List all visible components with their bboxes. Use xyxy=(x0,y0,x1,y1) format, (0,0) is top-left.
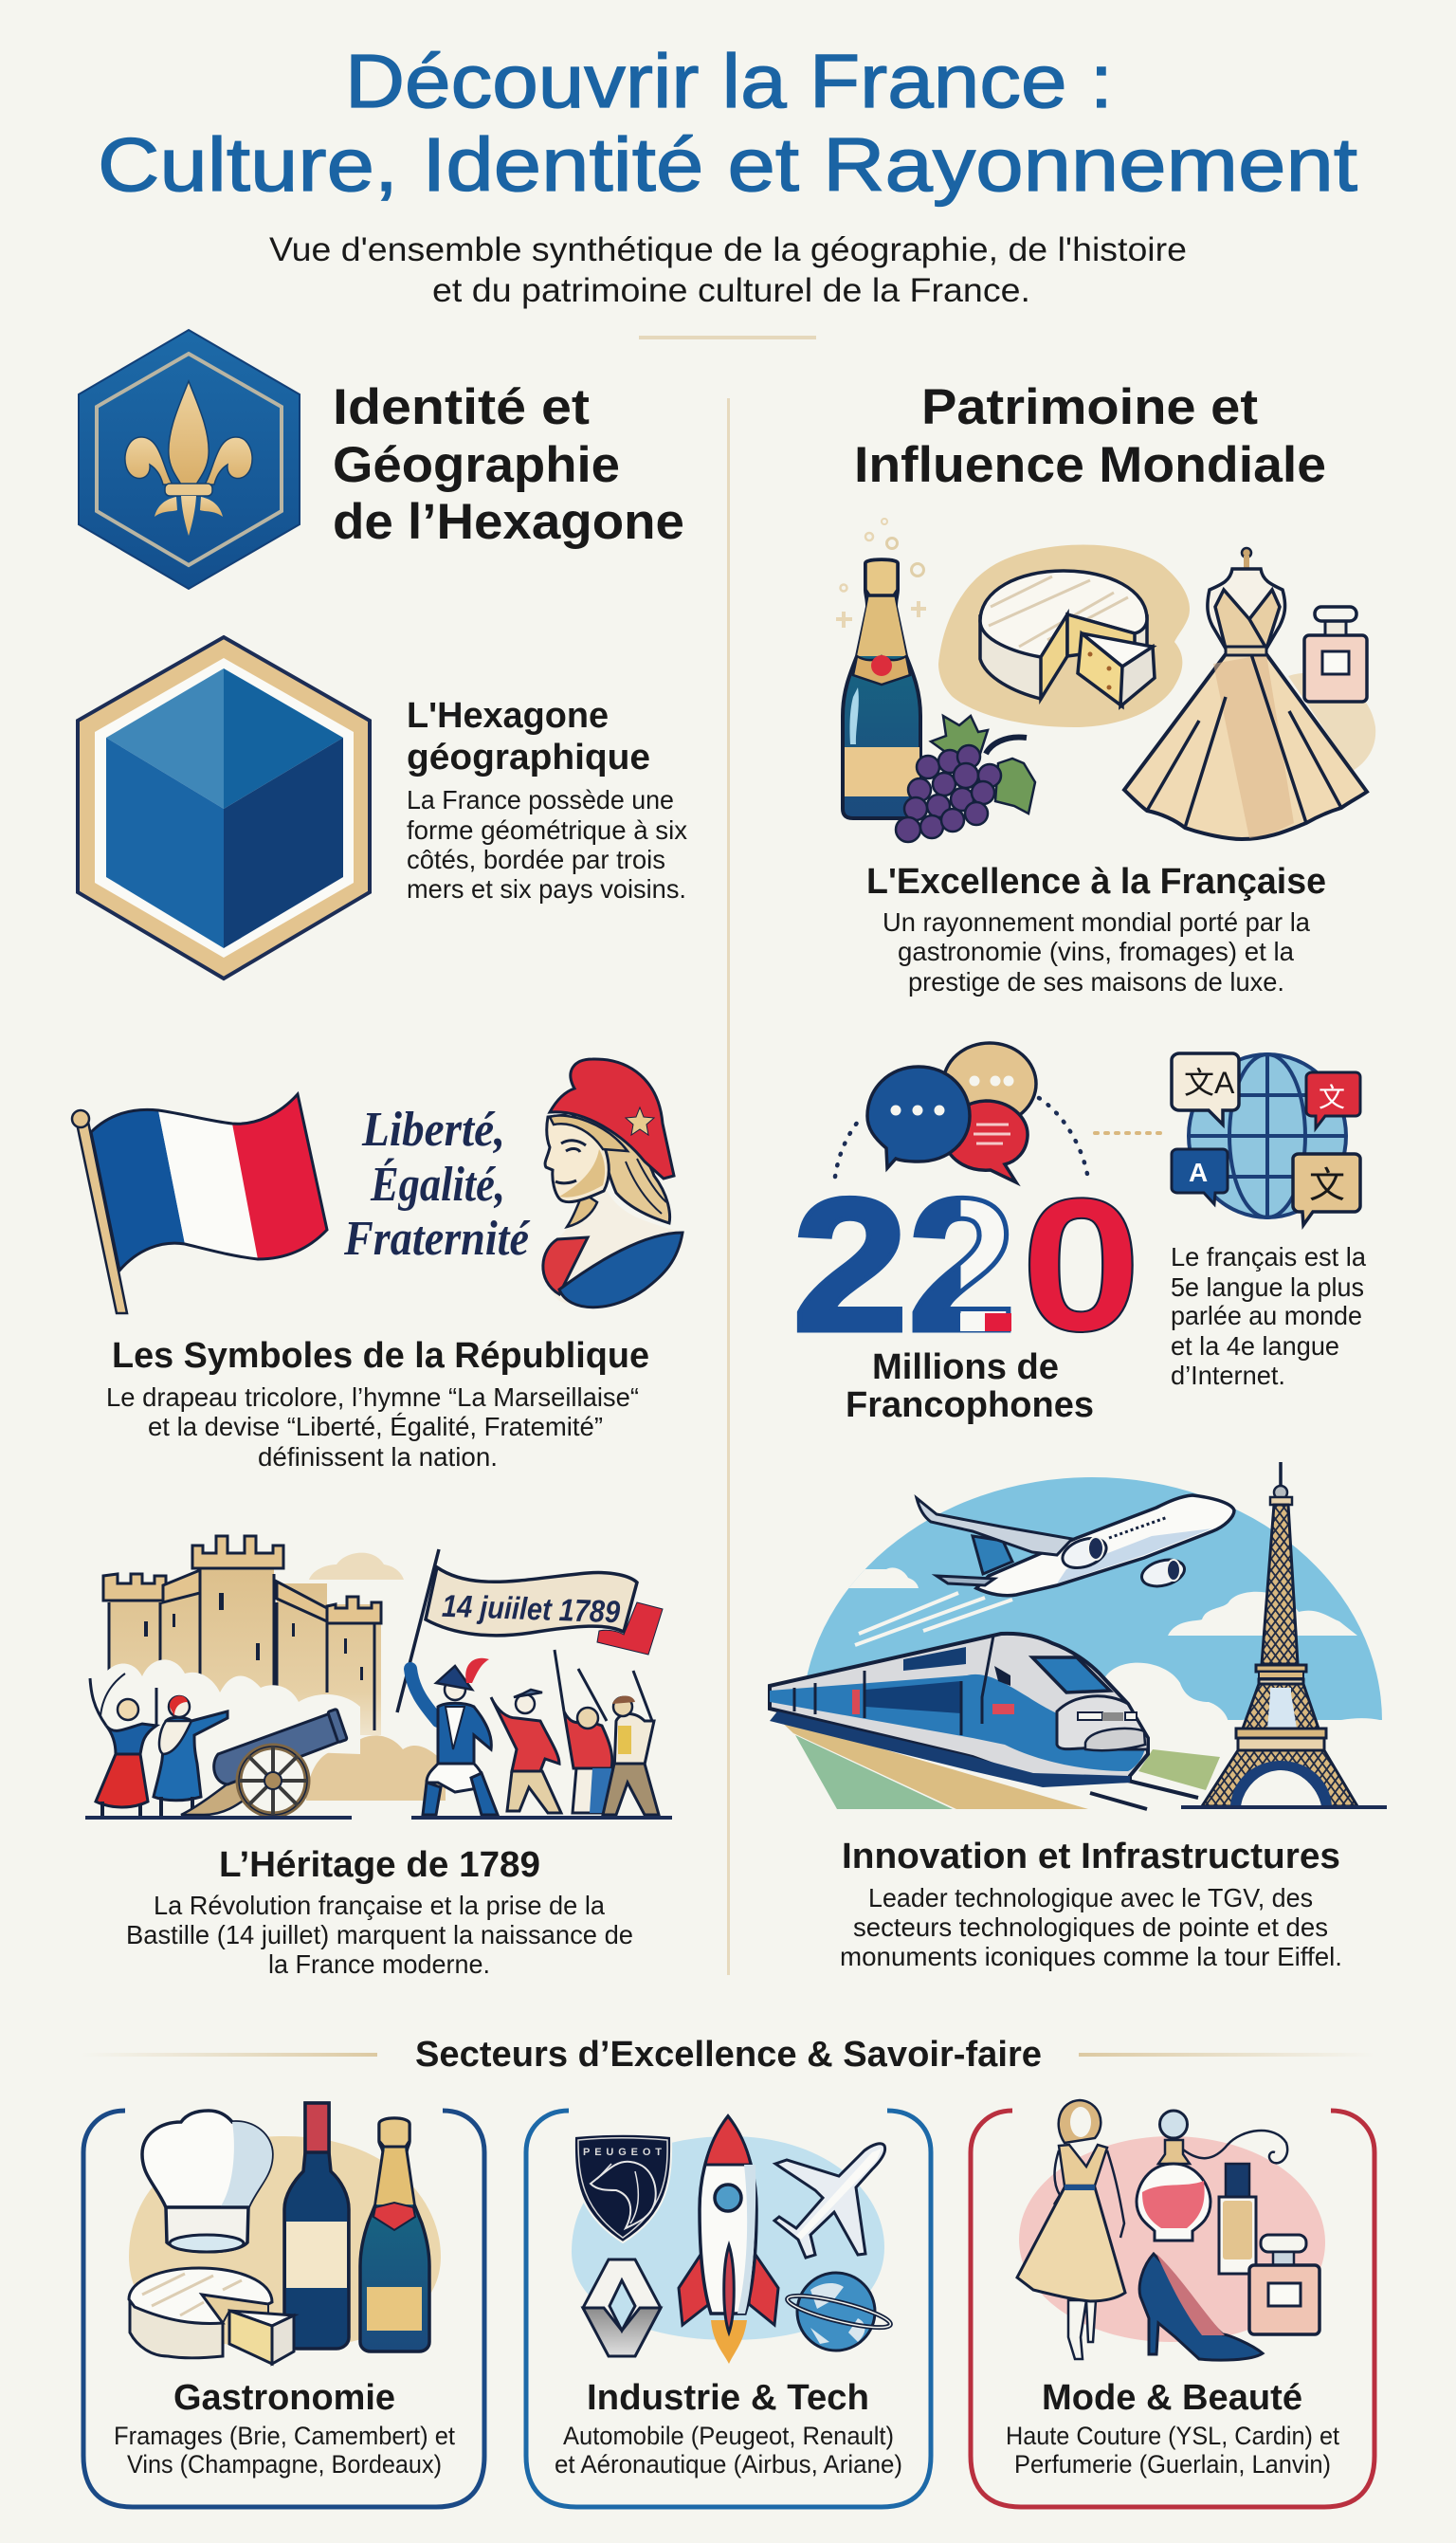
text: hexagone description: La France possède une xyxy=(407,785,674,814)
icon: fleur-de-lis hexagon badge xyxy=(79,330,300,589)
text: symboles description: et la devise “Liberté, Égalité, Fratemité” xyxy=(148,1412,603,1441)
icon: revolutionaries group xyxy=(410,1650,659,1815)
text: industrie description: Automobile (Peugeot, Renault) xyxy=(563,2422,894,2450)
panel: innovation et infrastructures xyxy=(770,1462,1387,1971)
text: motto xyxy=(343,1103,531,1266)
text: héritage heading: L’Héritage de 1789 xyxy=(219,1845,540,1885)
panel: l'Hexagone géographique xyxy=(78,637,687,979)
section heading: secteurs xyxy=(82,2035,1374,2075)
text: francophonie description: 5e langue la plus xyxy=(1171,1272,1364,1302)
text: motto: Égalité, xyxy=(370,1157,505,1212)
text: symboles description: Le drapeau tricolore, l’hymne “La Marseillaise“ xyxy=(106,1382,639,1412)
icon: Bastille fortress xyxy=(100,1536,446,1801)
text: innovation description: monuments iconiques comme la tour Eiffel. xyxy=(840,1942,1342,1971)
big number 220: 2 xyxy=(908,1160,1016,1371)
text: mode title: Mode & Beauté xyxy=(1042,2378,1302,2418)
text: symboles description xyxy=(106,1382,639,1472)
card: gastronomie xyxy=(83,2103,484,2507)
text: excellence heading: L'Excellence à la Française xyxy=(866,862,1326,902)
text: mode description xyxy=(1006,2422,1339,2479)
icon: fashion and beauty xyxy=(1017,2100,1325,2360)
heading: right column: Influence Mondiale xyxy=(854,437,1326,493)
icon: airplane xyxy=(917,1495,1234,1596)
icon: revolutionary flag banner: 14 juiilet 1789 xyxy=(442,1588,621,1629)
section heading: secteurs: Secteurs d’Excellence & Savoir-faire xyxy=(415,2035,1042,2075)
text: gastronomie title: Gastronomie xyxy=(173,2378,395,2418)
subtitle: et du patrimoine culturel de la France. xyxy=(432,272,1030,309)
text: hexagone description xyxy=(407,785,687,904)
icon: globe with translation bubbles: 文 xyxy=(1319,1077,1345,1115)
text: hexagone heading: géographique xyxy=(407,738,650,778)
text: hexagone heading xyxy=(407,696,650,778)
panel: excellence française xyxy=(836,519,1375,997)
big number 220: 0 xyxy=(1021,1160,1141,1371)
text: symboles heading: Les Symboles de la République xyxy=(112,1336,649,1376)
text: innovation description xyxy=(840,1883,1342,1971)
title: Culture, Identité et Rayonnement xyxy=(98,122,1357,207)
icon: perfume bottle xyxy=(1304,607,1367,702)
icon: industry emblems xyxy=(572,2116,893,2364)
text: excellence description: Un rayonnement mondial porté par la xyxy=(883,907,1310,937)
heading: left column xyxy=(333,379,684,550)
icon: globe with translation bubbles: 文A xyxy=(1184,1066,1235,1100)
text: industrie description: et Aéronautique (Airbus, Ariane) xyxy=(555,2450,902,2479)
icon: TGV train on tracks xyxy=(770,1634,1220,1809)
big number 220 xyxy=(792,1160,1141,1371)
icon: cheese with tan blob xyxy=(938,544,1190,727)
icon: sky circle with clouds xyxy=(796,1477,1384,1735)
text: francophones label: Millions de xyxy=(872,1347,1059,1387)
text: francophonie description: et la 4e langue xyxy=(1171,1331,1339,1361)
text: héritage description: Bastille (14 juillet) marquent la naissance de xyxy=(126,1920,633,1949)
icon: French flag xyxy=(72,1094,327,1313)
text: francophonie description: parlée au monde xyxy=(1171,1301,1362,1330)
icon: gown on mannequin xyxy=(1124,548,1375,839)
text: héritage description: La Révolution française et la prise de la xyxy=(154,1891,605,1920)
icon: globe with translation bubbles: 文 xyxy=(1309,1156,1345,1208)
panel: francophonie xyxy=(792,1043,1366,1425)
heading: left column: Géographie xyxy=(333,437,620,493)
text: excellence description: prestige de ses maisons de luxe. xyxy=(908,967,1284,997)
text: hexagone description: mers et six pays voisins. xyxy=(407,874,686,904)
text: francophones label: Francophones xyxy=(846,1385,1094,1425)
text: francophones label xyxy=(846,1347,1094,1425)
heading: right column xyxy=(854,379,1326,493)
text: héritage description xyxy=(126,1891,633,1979)
heading: left column: de l’Hexagone xyxy=(333,494,684,550)
text: francophonie description xyxy=(1171,1242,1366,1390)
subtitle xyxy=(269,231,1187,309)
title: Découvrir la France : xyxy=(345,39,1113,123)
text: mode description: Perfumerie (Guerlain, Lanvin) xyxy=(1014,2450,1331,2479)
card: mode et beauté xyxy=(971,2100,1374,2507)
panel: symboles de la République xyxy=(72,1059,682,1472)
icon: Marianne xyxy=(542,1059,682,1308)
text: héritage description: la France moderne. xyxy=(268,1949,490,1979)
text: hexagone description: côtés, bordée par trois xyxy=(407,845,665,874)
panel: héritage de 1789 xyxy=(85,1536,672,1979)
text: innovation description: secteurs technologiques de pointe et des xyxy=(853,1912,1328,1942)
icon: champagne bottle and bubbles xyxy=(836,519,926,818)
text: hexagone heading: L'Hexagone xyxy=(407,696,609,736)
text: excellence description: gastronomie (vins, fromages) et la xyxy=(898,937,1294,966)
icon: globe with translation bubbles: A xyxy=(1189,1158,1208,1187)
text: symboles description: définissent la nation. xyxy=(258,1442,498,1472)
heading: right column: Patrimoine et xyxy=(921,379,1258,435)
text: gastronomie description: Framages (Brie, Camembert) et xyxy=(114,2422,455,2450)
icon: grapes xyxy=(896,716,1035,842)
text: francophonie description: Le français est la xyxy=(1171,1242,1366,1272)
icon: speech bubbles xyxy=(835,1043,1088,1182)
icon: women with cannon xyxy=(90,1674,347,1816)
title xyxy=(98,39,1357,207)
text: excellence description xyxy=(883,907,1310,997)
icon: globe with translation bubbles xyxy=(1172,1053,1360,1225)
heading: left column: Identité et xyxy=(333,379,590,435)
text: gastronomie description xyxy=(114,2422,455,2479)
icon: revolutionary flag banner xyxy=(397,1549,663,1712)
icon: blue hexagon cube xyxy=(78,637,370,979)
text: mode description: Haute Couture (YSL, Cardin) et xyxy=(1006,2422,1339,2450)
icon: food and wine xyxy=(129,2103,441,2364)
text: hexagone description: forme géométrique à six xyxy=(407,815,687,845)
text: francophonie description: d’Internet. xyxy=(1171,1361,1285,1390)
subtitle: Vue d'ensemble synthétique de la géographie, de l'histoire xyxy=(269,231,1187,268)
text: innovation description: Leader technologique avec le TGV, des xyxy=(868,1883,1313,1912)
text: gastronomie description: Vins (Champagne, Bordeaux) xyxy=(127,2450,442,2479)
text: innovation heading: Innovation et Infrastructures xyxy=(842,1837,1340,1876)
card: industrie et tech xyxy=(526,2111,931,2507)
text: motto: Fraternité xyxy=(343,1212,531,1266)
icon: Eiffel tower xyxy=(1181,1462,1387,1809)
text: motto: Liberté, xyxy=(361,1103,505,1157)
big number 220: 2 xyxy=(792,1160,908,1371)
text: industrie title: Industrie & Tech xyxy=(587,2378,869,2418)
icon: industry emblems: PEUGEOT xyxy=(583,2147,662,2158)
text: industrie description xyxy=(555,2422,902,2479)
